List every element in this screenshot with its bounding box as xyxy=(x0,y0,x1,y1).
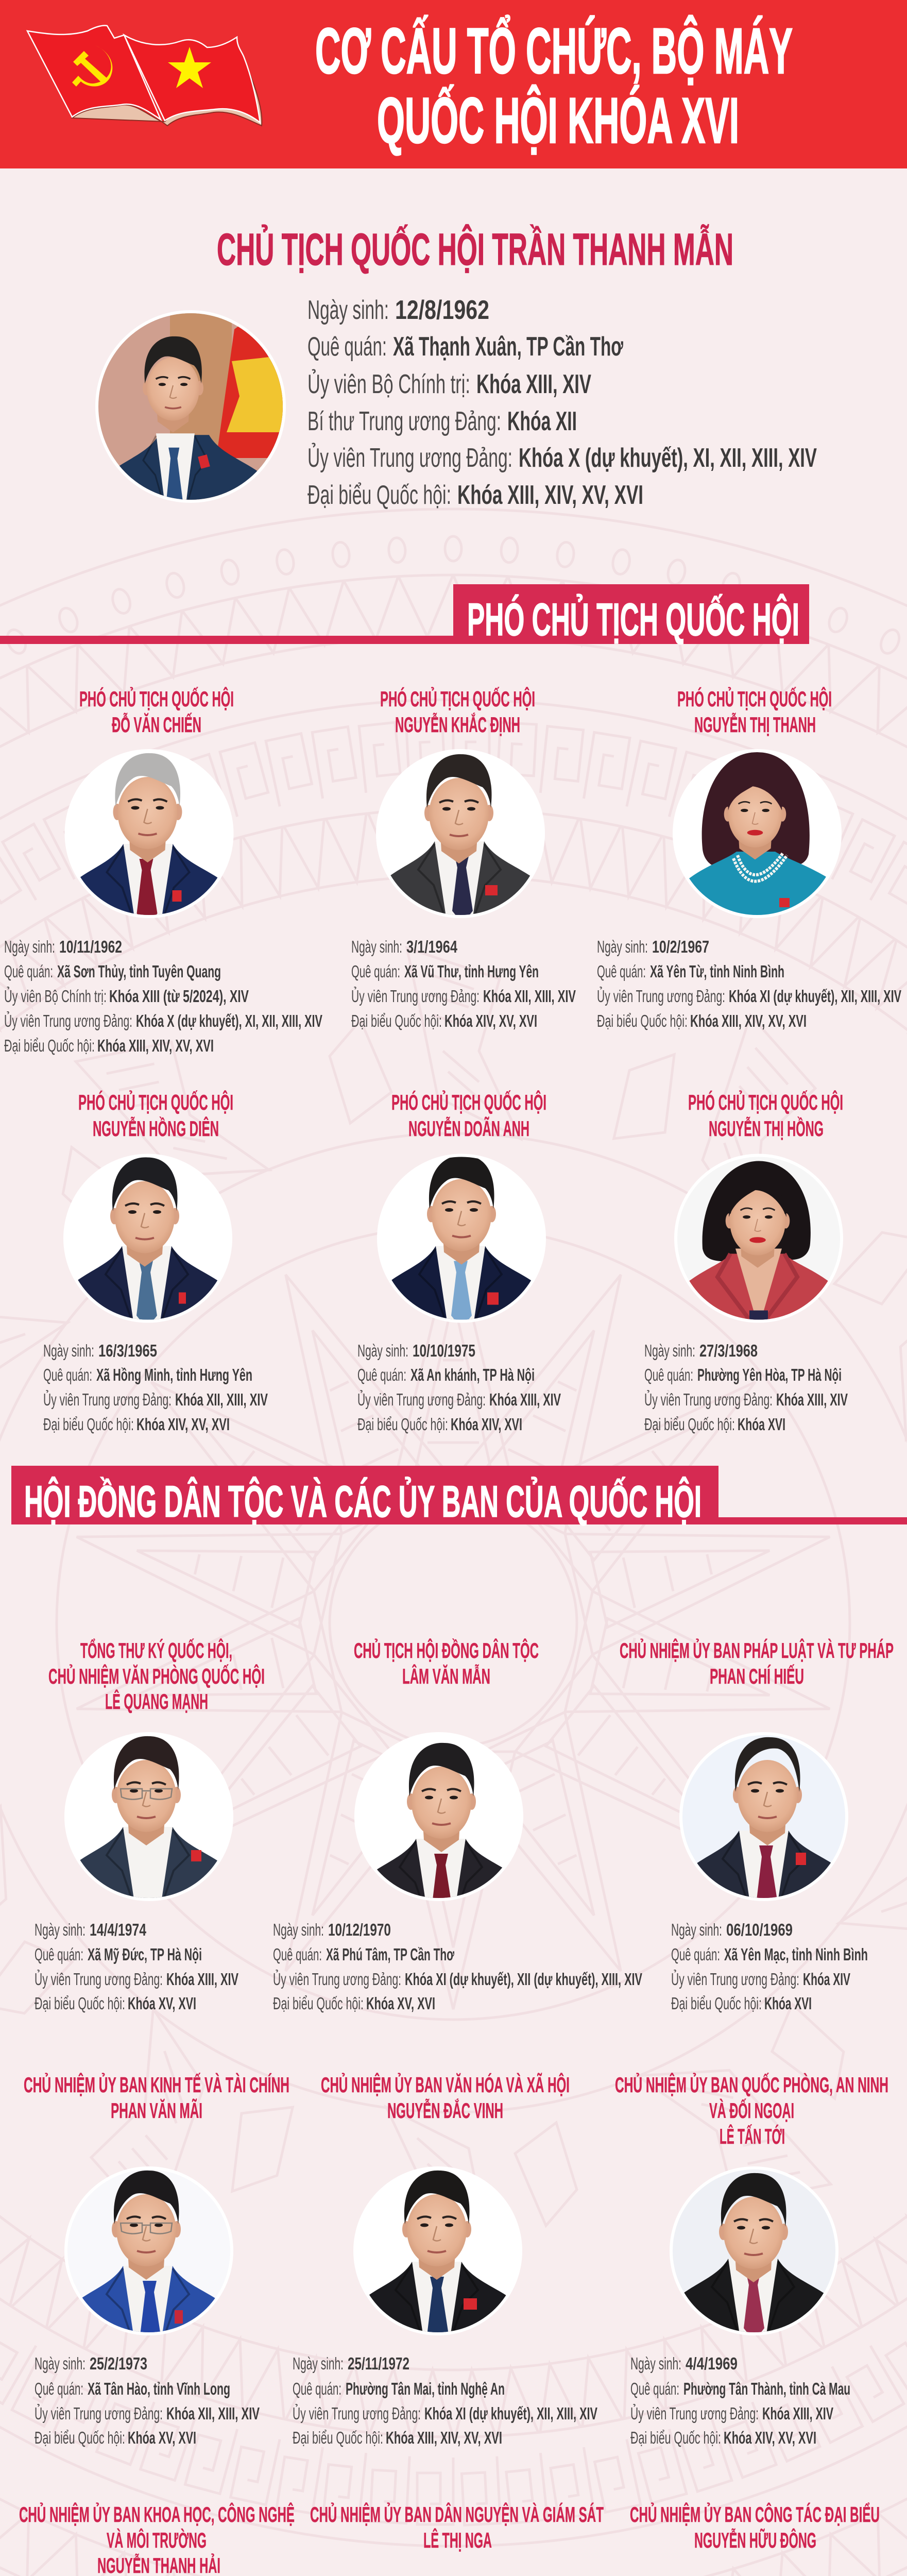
info: Ủy viên Trung ương Đảng: xyxy=(597,987,725,1006)
info: Quê quán: xyxy=(630,2379,679,2398)
heading: PHÓ CHỦ TỊCH QUỐC HỘI xyxy=(380,686,535,711)
info: chairman: Đại biểu Quốc hội: xyxy=(307,480,451,510)
section heading: Phó Chủ tịch Quốc hội xyxy=(0,584,809,645)
heading: PHAN CHÍ HIẾU xyxy=(710,1664,804,1688)
heading: NGUYỄN DOÃN ANH xyxy=(408,1116,529,1141)
panel: chairman xyxy=(93,225,817,519)
info: Đại biểu Quốc hội: xyxy=(671,1994,762,2013)
heading: PHÓ CHỦ TỊCH QUỐC HỘI xyxy=(391,1090,546,1114)
info: Ngày sinh: xyxy=(597,937,648,956)
heading: LÂM VĂN MẪN xyxy=(402,1664,490,1688)
header band xyxy=(0,0,907,168)
info: Khóa XIII, XIV, XV, XVI xyxy=(97,1036,214,1055)
info xyxy=(273,1920,642,2013)
panel: Nguyễn Thanh Hải xyxy=(19,2502,295,2576)
heading: NGUYỄN HỮU ĐÔNG xyxy=(694,2528,816,2552)
info: Khóa XII, XIII, XIV xyxy=(483,987,576,1006)
heading: PHÓ CHỦ TỊCH QUỐC HỘI xyxy=(78,1090,233,1114)
icon: party and national flags xyxy=(27,25,262,126)
info xyxy=(293,2354,597,2447)
info: Xã Yên Từ, tỉnh Ninh Bình xyxy=(650,962,784,981)
info: chairman: Ngày sinh: xyxy=(307,295,389,325)
info xyxy=(597,937,901,1030)
info: Ngày sinh: xyxy=(273,1920,324,1939)
info: 25/2/1973 xyxy=(90,2354,147,2373)
info: Ủy viên Trung ương Đảng: xyxy=(35,1970,163,1989)
info: Ngày sinh: xyxy=(644,1341,695,1360)
heading: NGUYỄN KHẮC ĐỊNH xyxy=(395,712,520,737)
heading: VÀ ĐỐI NGOẠI xyxy=(709,2098,794,2123)
info: Khóa XIV, XV, XVI xyxy=(444,1011,537,1030)
info: Đại biểu Quốc hội: xyxy=(4,1036,95,1055)
info: Ủy viên Trung ương Đảng: xyxy=(671,1970,799,1989)
heading xyxy=(354,1638,539,1688)
info: Đại biểu Quốc hội: xyxy=(35,1994,125,2013)
info: Khóa XIV xyxy=(803,1970,850,1989)
info: Quê quán: xyxy=(273,1945,322,1964)
info: chairman xyxy=(307,295,817,510)
info: Quê quán: xyxy=(293,2379,341,2398)
info: chairman: Ủy viên Trung ương Đảng: xyxy=(307,443,512,473)
info: 10/2/1967 xyxy=(652,937,709,956)
info: 10/11/1962 xyxy=(59,937,122,956)
info: Ủy viên Trung ương Đảng: xyxy=(293,2404,421,2423)
info: Xã An khánh, TP Hà Nội xyxy=(410,1365,535,1384)
info: Quê quán: xyxy=(597,962,646,981)
info: Khóa XI (dự khuyết), XII, XIII, XIV xyxy=(424,2404,597,2423)
info: 25/11/1972 xyxy=(348,2354,409,2373)
info: Khóa XI (dự khuyết), XII (dự khuyết), XIII, XIV xyxy=(405,1970,642,1989)
info: Khóa XV, XVI xyxy=(128,1994,196,2013)
portrait: Trần Thanh Mẫn xyxy=(95,310,286,503)
info: Khóa XIV, XV, XVI xyxy=(136,1415,230,1434)
info: Xã Mỹ Đức, TP Hà Nội xyxy=(88,1945,202,1964)
panel: Nguyễn Hồng Diên xyxy=(43,1090,268,1434)
info xyxy=(630,2354,850,2447)
info: Xã Phú Tâm, TP Cần Thơ xyxy=(326,1945,454,1964)
info: 10/12/1970 xyxy=(328,1920,391,1939)
info: Khóa XIII, XIV xyxy=(762,2404,833,2423)
portrait xyxy=(354,1732,523,1901)
heading xyxy=(19,2502,295,2576)
info: Khóa XIV, XV, XVI xyxy=(724,2428,816,2447)
portrait xyxy=(353,2166,522,2344)
icon: yellow star xyxy=(168,47,211,88)
title xyxy=(315,15,793,157)
heading: CHỦ NHIỆM ỦY BAN VĂN HÓA VÀ XÃ HỘI xyxy=(321,2072,570,2097)
info xyxy=(644,1341,848,1434)
heading xyxy=(620,1638,894,1688)
portrait xyxy=(64,1732,233,1909)
panel: Nguyễn Thị Thanh xyxy=(597,686,901,1030)
info: Ngày sinh: xyxy=(671,1920,722,1939)
info: chairman: Khóa XII xyxy=(507,406,577,436)
info: Đại biểu Quốc hội: xyxy=(597,1011,688,1030)
portrait xyxy=(666,2163,842,2341)
info: Khóa XIII, XIV, XV, XVI xyxy=(386,2428,502,2447)
heading xyxy=(677,686,832,737)
info xyxy=(351,937,576,1030)
panel: Phan Chí Hiếu xyxy=(620,1638,894,2013)
info xyxy=(35,2354,260,2447)
heading xyxy=(321,2072,570,2123)
info: Ngày sinh: xyxy=(35,2354,85,2373)
info: 10/10/1975 xyxy=(413,1341,475,1360)
info xyxy=(43,1341,268,1434)
heading xyxy=(24,2072,289,2123)
heading: TỔNG THƯ KÝ QUỐC HỘI, xyxy=(80,1637,232,1663)
panel: Lâm Văn Mẫn xyxy=(273,1638,642,2013)
panel: Nguyễn Hữu Đông xyxy=(613,2502,901,2576)
info: Quê quán: xyxy=(35,1945,83,1964)
heading: CHỦ NHIỆM VĂN PHÒNG QUỐC HỘI xyxy=(48,1664,265,1688)
info: Quê quán: xyxy=(4,962,53,981)
info: Khóa X (dự khuyết), XI, XII, XIII, XIV xyxy=(136,1011,322,1030)
info: Khóa XIII (từ 5/2024), XIV xyxy=(109,987,249,1006)
heading: CHỦ TỊCH HỘI ĐỒNG DÂN TỘC xyxy=(354,1638,539,1663)
panel: Đỗ Văn Chiến xyxy=(4,686,322,1055)
info: Quê quán: xyxy=(644,1365,693,1384)
info: Xã Sơn Thủy, tỉnh Tuyên Quang xyxy=(57,962,221,981)
info: 27/3/1968 xyxy=(699,1341,758,1360)
heading: CHỦ NHIỆM ỦY BAN KINH TẾ VÀ TÀI CHÍNH xyxy=(24,2072,289,2097)
info: chairman: Khóa XIII, XIV, XV, XVI xyxy=(457,480,643,510)
info: Phường Tân Mai, tỉnh Nghệ An xyxy=(346,2379,505,2398)
heading xyxy=(615,2072,888,2148)
panel: Lê Tấn Tới xyxy=(615,2072,888,2447)
info: Đại biểu Quốc hội: xyxy=(630,2428,721,2447)
info: Ngày sinh: xyxy=(351,937,402,956)
info: Ủy viên Trung ương Đảng: xyxy=(43,1390,172,1409)
icon: hammer and sickle xyxy=(72,45,112,87)
info: Xã Tân Hào, tỉnh Vĩnh Long xyxy=(88,2379,230,2398)
info: Ngày sinh: xyxy=(630,2354,681,2373)
heading xyxy=(391,1090,546,1141)
heading xyxy=(48,1637,265,1714)
heading xyxy=(78,1090,233,1141)
info: Ngày sinh: xyxy=(293,2354,344,2373)
info: Ngày sinh: xyxy=(357,1341,408,1360)
heading: NGUYỄN THỊ HỒNG xyxy=(709,1116,824,1141)
portrait xyxy=(377,1154,546,1328)
heading: CHỦ NHIỆM ỦY BAN KHOA HỌC, CÔNG NGHỆ xyxy=(19,2502,295,2527)
heading xyxy=(310,2502,604,2552)
info: 14/4/1974 xyxy=(90,1920,146,1939)
heading: NGUYỄN THỊ THANH xyxy=(694,712,816,737)
portrait xyxy=(63,1154,232,1328)
portrait xyxy=(65,749,234,926)
info: Đại biểu Quốc hội: xyxy=(273,1994,364,2013)
info: chairman: Quê quán: xyxy=(307,332,387,362)
info: Ủy viên Trung ương Đảng: xyxy=(4,1011,132,1030)
info: Quê quán: xyxy=(351,962,400,981)
heading: VÀ MÔI TRƯỜNG xyxy=(107,2528,207,2552)
info: Ngày sinh: xyxy=(4,937,55,956)
info: Xã Hồng Minh, tỉnh Hưng Yên xyxy=(96,1365,252,1384)
info: Ủy viên Trung ương Đảng: xyxy=(351,987,480,1006)
info: Ủy viên Trung ương Đảng: xyxy=(630,2404,759,2423)
info: Ủy viên Bộ Chính trị: xyxy=(4,987,107,1006)
info: Khóa XIII, XIV xyxy=(166,1970,238,1989)
info: Đại biểu Quốc hội: xyxy=(644,1415,735,1434)
heading xyxy=(79,686,234,737)
portrait xyxy=(671,1151,846,1328)
portrait xyxy=(673,749,842,924)
heading xyxy=(380,686,535,737)
info: Quê quán: xyxy=(43,1365,92,1384)
info: chairman: Bí thư Trung ương Đảng: xyxy=(307,406,501,436)
info: Khóa XIII, XIV xyxy=(489,1390,561,1409)
info xyxy=(4,937,322,1055)
heading: PHAN VĂN MÃI xyxy=(111,2098,202,2123)
panel: Nguyễn Đắc Vinh xyxy=(293,2072,597,2447)
info xyxy=(671,1920,868,2013)
info: Ủy viên Trung ương Đảng: xyxy=(357,1390,486,1409)
heading: ĐỖ VĂN CHIẾN xyxy=(112,712,201,737)
portrait xyxy=(61,2163,236,2348)
info: chairman: Xã Thạnh Xuân, TP Cần Thơ xyxy=(393,332,623,362)
info: Quê quán: xyxy=(357,1365,406,1384)
info: chairman: Khóa XIII, XIV xyxy=(476,369,591,399)
info: 16/3/1965 xyxy=(98,1341,157,1360)
info xyxy=(357,1341,561,1434)
heading xyxy=(688,1090,843,1141)
info: Quê quán: xyxy=(671,1945,720,1964)
info: Khóa XV, XVI xyxy=(366,1994,435,2013)
info: Khóa XIV, XVI xyxy=(451,1415,522,1434)
panel: Nguyễn Thị Hồng xyxy=(644,1090,848,1434)
info: Xã Vũ Thư, tỉnh Hưng Yên xyxy=(404,962,539,981)
heading: PHÓ CHỦ TỊCH QUỐC HỘI xyxy=(79,686,234,711)
info: Khóa XV, XVI xyxy=(128,2428,196,2447)
info: 4/4/1969 xyxy=(686,2354,738,2373)
panel: Lê Thị Nga xyxy=(310,2502,604,2576)
heading: CHỦ NHIỆM ỦY BAN DÂN NGUYỆN VÀ GIÁM SÁT xyxy=(310,2502,604,2527)
panel: Nguyễn Doãn Anh xyxy=(357,1090,561,1434)
portrait xyxy=(676,1729,851,1913)
info: Khóa XVI xyxy=(738,1415,785,1434)
portrait xyxy=(376,749,545,924)
info: Khóa XVI xyxy=(764,1994,812,2013)
info: 3/1/1964 xyxy=(406,937,457,956)
panel: Phan Văn Mãi xyxy=(24,2072,289,2447)
info: Đại biểu Quốc hội: xyxy=(293,2428,383,2447)
info: Ủy viên Trung ương Đảng: xyxy=(273,1970,401,1989)
info: chairman: Ủy viên Bộ Chính trị: xyxy=(307,369,470,399)
panel: Nguyễn Khắc Định xyxy=(351,686,576,1030)
heading xyxy=(630,2502,880,2552)
heading: LÊ QUANG MẠNH xyxy=(105,1689,208,1714)
info: Ủy viên Trung ương Đảng: xyxy=(644,1390,773,1409)
info: Khóa XII, XIII, XIV xyxy=(166,2404,260,2423)
info: Đại biểu Quốc hội: xyxy=(357,1415,448,1434)
info: 06/10/1969 xyxy=(726,1920,793,1939)
info xyxy=(35,1920,238,2013)
heading: LÊ THỊ NGA xyxy=(423,2528,492,2552)
info: Ngày sinh: xyxy=(35,1920,85,1939)
info: Quê quán: xyxy=(35,2379,83,2398)
panel: Lê Quang Mạnh xyxy=(35,1637,265,2013)
info: chairman: 12/8/1962 xyxy=(395,295,489,325)
info: Đại biểu Quốc hội: xyxy=(43,1415,134,1434)
info: Khóa XIII, XIV, XV, XVI xyxy=(690,1011,807,1030)
info: Ủy viên Trung ương Đảng: xyxy=(35,2404,163,2423)
info: Đại biểu Quốc hội: xyxy=(35,2428,125,2447)
info: Khóa XII, XIII, XIV xyxy=(175,1390,268,1409)
info: Khóa XIII, XIV xyxy=(776,1390,848,1409)
info: Đại biểu Quốc hội: xyxy=(351,1011,442,1030)
info: Ngày sinh: xyxy=(43,1341,94,1360)
heading: NGUYỄN HỒNG DIÊN xyxy=(93,1116,219,1141)
heading: LÊ TẤN TỚI xyxy=(720,2124,785,2148)
heading: NGUYỄN ĐẮC VINH xyxy=(387,2098,503,2123)
